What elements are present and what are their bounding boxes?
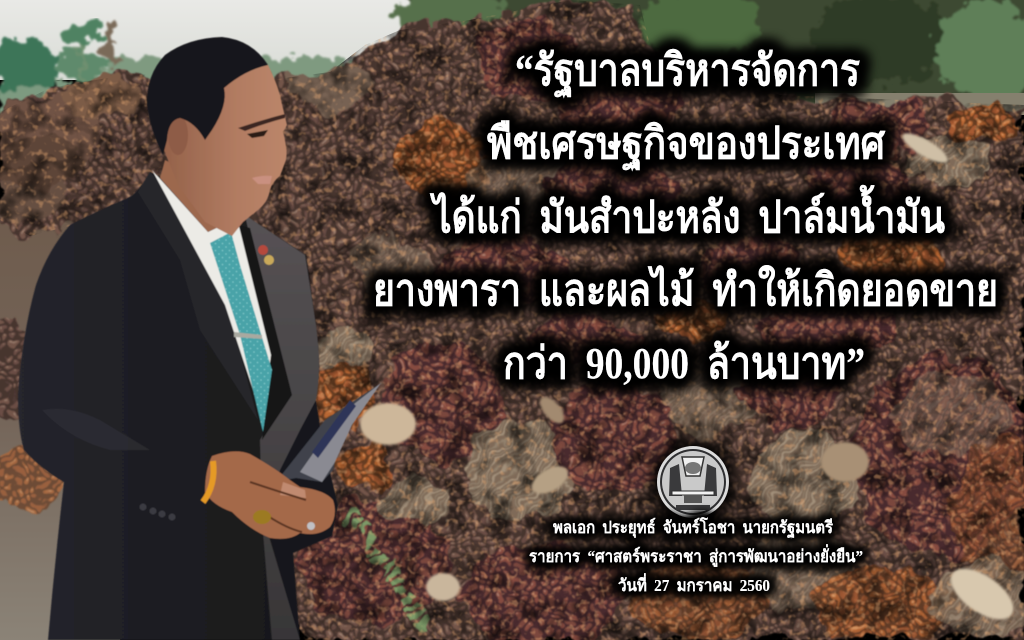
background: ground (0, 205, 120, 640)
green fern leaf (350, 515, 425, 628)
speaker attribution (529, 517, 863, 595)
background: sky (0, 0, 1024, 80)
speaker attribution: พลเอก ประยุทธ์ จันทร์โอชา นายกรัฐมนตรี (553, 517, 834, 539)
face (164, 65, 287, 236)
suit jacket (18, 172, 338, 640)
person: prime minister holding trophy (18, 37, 381, 640)
dark right lapel (238, 225, 292, 440)
ear (168, 115, 188, 155)
quote heading (373, 46, 998, 388)
sleeve button row (140, 504, 176, 520)
hands (205, 451, 335, 539)
speaker attribution: วันที่ 27 มกราคม 2560 (618, 573, 770, 595)
orange wristband (203, 461, 214, 502)
right jacket side (245, 215, 319, 640)
background: distant tree line and palms (0, 23, 410, 120)
gold ring (253, 510, 271, 524)
crystal trophy (276, 383, 381, 482)
seal dark halo (650, 439, 736, 527)
lapel pins (258, 245, 274, 265)
hair (147, 37, 268, 155)
quote heading: “รัฐบาลบริหารจัดการ (515, 46, 860, 98)
quote heading: กว่า 90,000 ล้านบาท” (503, 339, 865, 388)
sleeve shine (42, 409, 150, 450)
shirt (152, 170, 271, 420)
eye and mouth (238, 114, 285, 184)
background: concrete wall (815, 93, 1024, 115)
background: upper right trees (395, 0, 1024, 110)
left lapel (138, 172, 258, 420)
fruit at left edge (0, 315, 65, 510)
tie (210, 232, 272, 432)
quote heading: พืชเศรษฐกิจของประเทศ (487, 119, 886, 171)
cut stems (360, 128, 1022, 629)
speaker attribution: รายการ “ศาสตร์พระราชา สู่การพัฒนาอย่างยั่งยืน” (529, 544, 863, 568)
silver ring (307, 522, 315, 530)
neck (160, 160, 240, 232)
government seal emblem (657, 446, 729, 518)
tie clip (234, 332, 262, 339)
